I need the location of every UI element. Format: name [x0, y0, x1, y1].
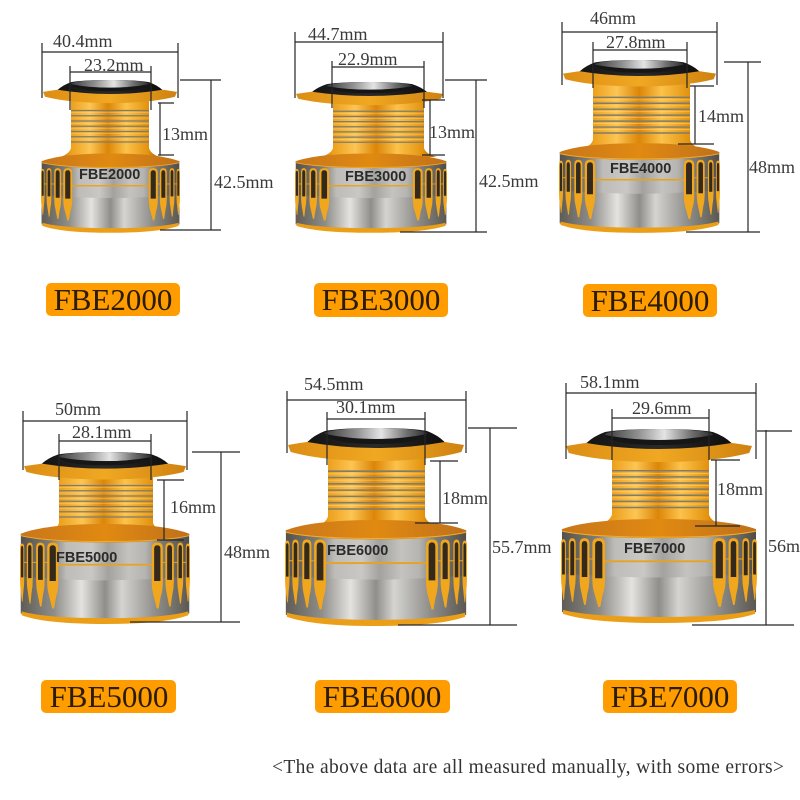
- panel: FBE4000 spool: [559, 8, 795, 318]
- dimensions: FBE4000: [562, 8, 795, 232]
- dimensions: FBE2000: [42, 31, 274, 230]
- dimensions: FBE3000: 44.7mm: [308, 24, 368, 44]
- spool image: FBE6000: FBE6000: [327, 543, 388, 559]
- dimensions: FBE4000: 14mm: [698, 106, 744, 126]
- dimensions: FBE2000: 42.5mm: [214, 172, 274, 192]
- label: FBE5000: FBE5000: [50, 679, 168, 714]
- spool image: FBE7000: FBE7000: [624, 541, 685, 557]
- spool image: FBE6000: [285, 428, 467, 626]
- dimensions: FBE4000: 46mm: [590, 8, 636, 28]
- spool image: FBE5000: [20, 452, 190, 624]
- dimensions: FBE5000: 48mm: [224, 542, 270, 562]
- dimensions: FBE2000: 23.2mm: [84, 55, 144, 75]
- spool image: FBE3000: [295, 82, 447, 233]
- panel: FBE7000 spool: [561, 372, 800, 714]
- dimensions: FBE3000: 13mm: [429, 122, 475, 142]
- dimensions: FBE5000: 50mm: [55, 399, 101, 419]
- panel: FBE5000 spool: [20, 399, 270, 714]
- label: FBE2000: FBE2000: [54, 282, 172, 317]
- spool image: FBE7000: [561, 429, 757, 623]
- dimensions: FBE3000: [295, 24, 539, 232]
- spool image: FBE3000: FBE3000: [345, 169, 406, 185]
- dimensions: FBE6000: 54.5mm: [304, 374, 364, 394]
- dimensions: FBE4000: 27.8mm: [606, 32, 666, 52]
- dimensions: FBE3000: 22.9mm: [338, 49, 398, 69]
- spool image: FBE5000: FBE5000: [56, 550, 117, 566]
- dimensions: FBE5000: 28.1mm: [72, 422, 132, 442]
- dimensions: FBE7000: 18mm: [717, 479, 763, 499]
- panel: FBE6000 spool: [285, 374, 552, 714]
- spool image: FBE2000: [41, 80, 180, 233]
- dimensions: FBE6000: 55.7mm: [492, 537, 552, 557]
- panel: FBE3000 spool: [295, 24, 539, 317]
- spool image: FBE4000: [559, 60, 720, 233]
- dimensions: FBE7000: [566, 372, 800, 625]
- footnote: <The above data are all measured manually, with some errors>: [272, 757, 784, 778]
- dimensions: FBE6000: 18mm: [442, 488, 488, 508]
- dimensions: FBE7000: 29.6mm: [632, 398, 692, 418]
- spool image: FBE4000: FBE4000: [610, 161, 671, 177]
- dimensions: FBE6000: 30.1mm: [336, 397, 396, 417]
- dimensions: FBE2000: 40.4mm: [53, 31, 113, 51]
- label: FBE7000: FBE7000: [611, 679, 729, 714]
- dimensions: FBE3000: 42.5mm: [479, 171, 539, 191]
- dimensions: FBE2000: 13mm: [162, 124, 208, 144]
- panel: FBE2000 spool: [41, 31, 274, 317]
- dimensions: FBE5000: 16mm: [170, 497, 216, 517]
- dimensions: FBE5000: [23, 399, 270, 622]
- label: FBE4000: FBE4000: [591, 283, 709, 318]
- dimensions: FBE6000: [287, 374, 552, 625]
- label: FBE6000: FBE6000: [323, 679, 441, 714]
- label: FBE3000: FBE3000: [322, 282, 440, 317]
- dimensions: FBE4000: 48mm: [749, 157, 795, 177]
- spool image: FBE2000: FBE2000: [79, 167, 140, 183]
- dimensions: FBE7000: 58.1mm: [580, 372, 640, 392]
